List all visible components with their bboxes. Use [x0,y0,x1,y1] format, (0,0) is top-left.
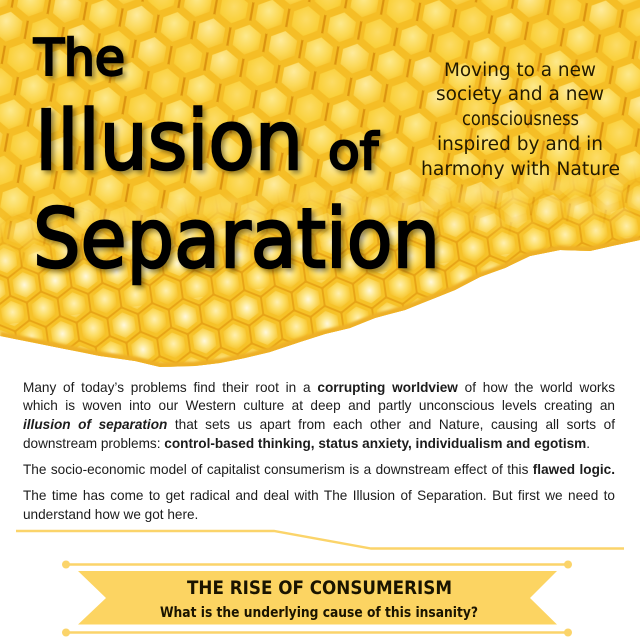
title word: of: of [328,123,379,181]
title shadow: Illusion [38,97,306,192]
subtitle: society and a new [436,84,604,105]
ribbon banner [78,571,557,624]
intro text block: The socio-economic model of capitalist consumerism is a downstream effect of this flawed logic. [23,462,615,477]
title word: Separation: Separation [33,192,440,287]
title [33,29,443,290]
title shadow [36,32,443,290]
intro text block: The time has come to get radical and deal with The Illusion of Separation. But first we need to [23,488,615,503]
title shadow: of [331,126,382,184]
intro text block: understand how we got here. [23,507,198,522]
banner subheading: What is the underlying cause of this insanity? [160,605,478,621]
intro text block: illusion of separation that sets us apart from each other and Nature, causing all sorts of [23,417,615,432]
title word: The: The [33,29,125,87]
subtitle [421,60,620,180]
banner heading: THE RISE OF CONSUMERISM [187,577,452,599]
header: honeycomb image with title [0,0,640,367]
title shadow: The [36,32,128,90]
title word: Illusion: Illusion [35,94,303,189]
intro text block: downstream problems: control-based thinking, status anxiety, individualism and egotism. [23,436,590,451]
title shadow: Separation [36,195,443,290]
intro text block: which is woven into our Western culture at deep and partly unconscious levels creating an [23,398,615,413]
subtitle: inspired by and in [437,134,603,155]
intro text block: Many of today’s problems find their root in a corrupting worldview of how the world works [23,380,615,395]
honeycomb photo [0,0,640,380]
subtitle: consciousness [462,109,579,130]
intro text block [23,380,616,522]
subtitle: Moving to a new [444,60,596,81]
subtitle: harmony with Nature [421,159,620,180]
